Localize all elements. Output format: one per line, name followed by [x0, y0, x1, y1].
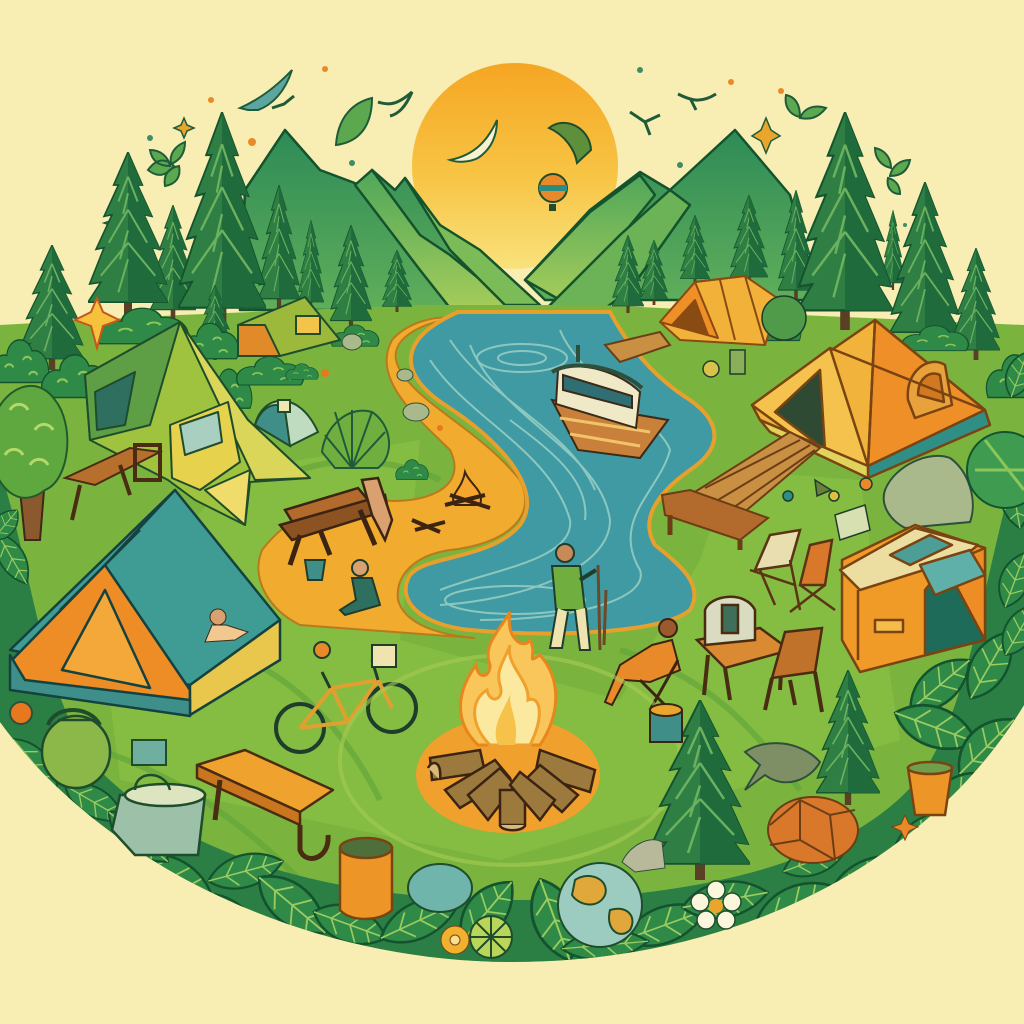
- teal tent lower left: [10, 490, 280, 716]
- camp items on grass: [703, 296, 872, 540]
- left leaves: [0, 536, 30, 585]
- rock right: [884, 456, 973, 528]
- table and chair: [697, 597, 822, 712]
- standing person fishing: [550, 544, 606, 650]
- bicycle: [276, 642, 416, 752]
- folding chairs: [750, 530, 835, 612]
- icon: sparkles: [104, 118, 780, 231]
- orange tent upper right: [660, 276, 780, 345]
- right leaves: [910, 658, 971, 707]
- sand path: [258, 317, 525, 638]
- small campfire on sand: [412, 472, 490, 532]
- flames: [460, 612, 556, 745]
- daisy flower: [691, 881, 741, 929]
- blue stone: [408, 864, 472, 912]
- lizard: [745, 743, 820, 790]
- icon: bird in front of sun: [450, 120, 497, 162]
- icon: leaf sprigs: [148, 95, 910, 194]
- water ripples: [430, 330, 670, 620]
- person on bench: [362, 478, 392, 540]
- yellow flower: [441, 926, 469, 954]
- mountain range right: [525, 130, 820, 300]
- foreground objects: [10, 702, 952, 958]
- large tree left: [0, 386, 67, 540]
- lime slice: [470, 916, 512, 958]
- wooden table by green tent: [65, 445, 160, 520]
- globe: [558, 863, 642, 947]
- icon: large bird left: [240, 70, 292, 110]
- small canister: [650, 704, 682, 742]
- picnic bench on sand: [280, 478, 392, 565]
- small green tent: [238, 297, 340, 356]
- large orange tent right: [752, 320, 990, 478]
- mountains: [240, 130, 820, 312]
- paraglider and balloon: [539, 123, 591, 211]
- seated person on sand: [340, 560, 380, 615]
- icon: hot air balloon: [539, 174, 567, 211]
- cooler: [840, 525, 985, 672]
- lake: [406, 312, 714, 633]
- bucket on sand: [305, 560, 325, 580]
- cooking pot: [132, 740, 166, 765]
- barrel: [340, 838, 392, 919]
- seated woman: [605, 619, 680, 712]
- mountain range left: [240, 130, 495, 310]
- logs: [428, 750, 595, 830]
- foreground trees: [650, 670, 880, 880]
- boat: [552, 345, 668, 458]
- icon: paraglider: [549, 123, 591, 163]
- round green plant right: [967, 432, 1024, 508]
- wooden stairs and deck: [605, 332, 820, 550]
- foreground bench: [197, 750, 333, 858]
- ground bowl: [0, 305, 1024, 1024]
- star burst: [75, 298, 119, 348]
- stove on table: [705, 597, 755, 645]
- icon: sky leaf: [336, 98, 372, 145]
- foliage base band: [0, 483, 1024, 962]
- trees: [20, 112, 1000, 370]
- bushes behind camp: [0, 304, 1024, 408]
- rock: [622, 840, 665, 872]
- foliage border: [0, 348, 1024, 968]
- orange ball left: [10, 702, 32, 724]
- rocks and shrubs on left shore: [286, 334, 443, 480]
- sky birds, leaves and sparkles: [104, 66, 910, 231]
- orange sphere: [768, 797, 858, 863]
- person lounging on tent: [205, 609, 248, 642]
- large green tent: [85, 322, 310, 525]
- campfire: [340, 612, 680, 865]
- kettle: [42, 710, 110, 788]
- sun: [412, 63, 618, 269]
- orange pail: [908, 762, 952, 815]
- small star: [892, 815, 918, 840]
- dome tent: [255, 400, 318, 446]
- bucket: [112, 775, 205, 855]
- icon: small birds: [272, 92, 716, 135]
- green canopy umbrella: [322, 410, 389, 468]
- fire glow: [416, 717, 600, 833]
- bottom leaves: [64, 785, 117, 822]
